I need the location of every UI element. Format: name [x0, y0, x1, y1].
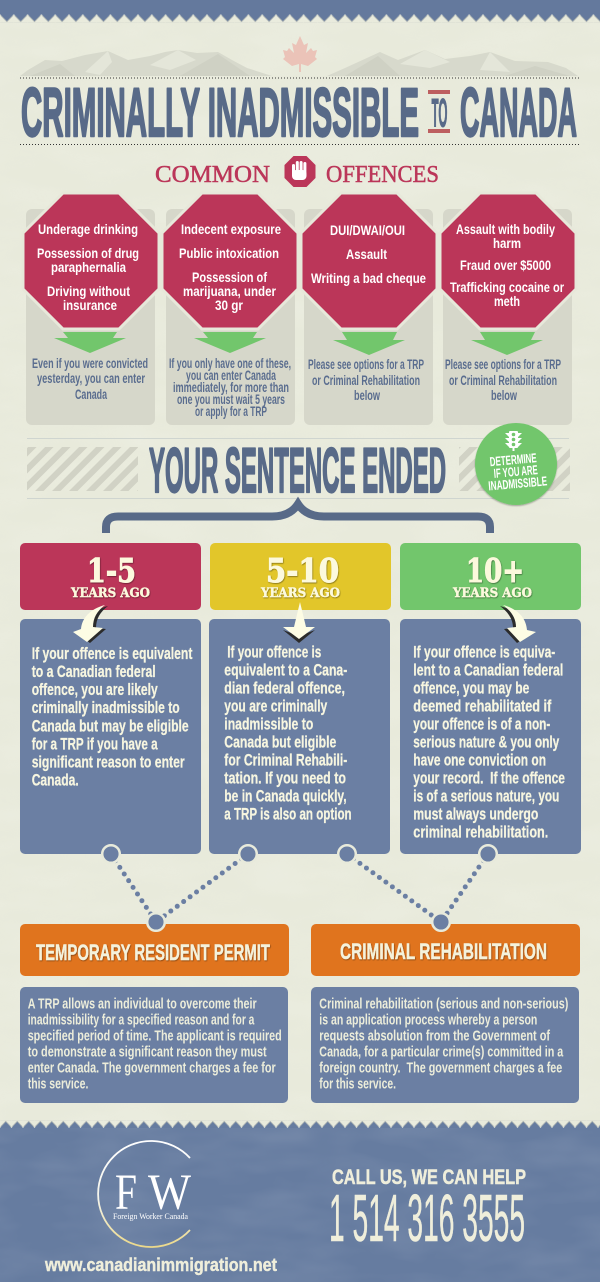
- stop octagon 4: harm: [493, 235, 521, 251]
- panel: 5-10 years text: dian federal offence,: [224, 678, 345, 697]
- panel: 5-10 years text: for Criminal Rehabili-: [224, 750, 347, 769]
- connectors to criminal rehabilitation: [338, 845, 497, 922]
- logo: foreign worker canada: [98, 1141, 192, 1247]
- panel: offence card 1: [23, 193, 159, 425]
- stop octagon 1: Driving without: [47, 283, 130, 299]
- panel: offence card 4: [440, 193, 576, 425]
- panel: 1-5 years text: for a TRP if you have a: [32, 734, 158, 754]
- panel: 1-5 years text: offence, you are likely: [32, 680, 158, 699]
- note 2: one you must wait 5 years: [177, 392, 285, 407]
- arrow: curved right: [500, 605, 536, 643]
- note 3: or Criminal Rehabilitation: [312, 373, 420, 388]
- stop octagon 3: Assault: [346, 246, 387, 262]
- note 1: [32, 356, 148, 402]
- node: criminal rehabilitation: [432, 913, 450, 931]
- stop octagon 1: Possession of drug: [37, 245, 139, 261]
- panel: 5-10 years text: equivalent to a Cana-: [224, 660, 347, 679]
- badge: determine if you are inadmissible: INADMISSIBLE: [488, 473, 548, 493]
- mountains illustration: [20, 50, 578, 76]
- note 4: below: [491, 388, 517, 403]
- panel: offence card 2: [162, 193, 298, 425]
- panel: 10+ years text: criminal rehabilitation.: [413, 822, 548, 841]
- stop octagon 1: paraphernalia: [51, 259, 126, 275]
- panel: 10+ years text: [400, 619, 581, 854]
- panel: 10+ years text: have one conviction on: [413, 750, 546, 769]
- panel: 1-5 years text: Canada but may be eligible: [32, 716, 189, 736]
- footer band: [0, 1121, 600, 1282]
- panel: 10+ years text: must always undergo: [413, 804, 538, 823]
- header: criminal rehabilitation: [311, 924, 580, 976]
- note 3: Please see options for a TRP: [308, 357, 424, 372]
- note 2: [169, 356, 291, 419]
- note 4: [445, 357, 561, 403]
- arrow 3: [333, 332, 405, 355]
- header: 5-10 years ago: [210, 543, 391, 610]
- stop octagon 4: meth: [494, 293, 520, 309]
- stop octagon 2: 30 gr: [215, 297, 243, 313]
- icon: stop hand: [284, 156, 316, 187]
- stop octagon 2: Possession of: [192, 269, 267, 285]
- note 1: Even if you were convicted: [32, 356, 148, 371]
- header: 1-5 years ago: [20, 543, 201, 610]
- bracket: [106, 504, 490, 533]
- badge: determine if you are inadmissible: [475, 423, 557, 505]
- heading: common offences: COMMON: [155, 162, 270, 188]
- header: 5-10 years ago: 5-10: [266, 551, 339, 590]
- panel: trp description: this service.: [28, 1075, 88, 1092]
- stop octagon 1: [23, 193, 159, 329]
- header: 5-10 years ago: YEARS AGO: [260, 586, 340, 601]
- header: 1-5 years ago: YEARS AGO: [70, 586, 150, 601]
- panel: trp description: A TRP allows an individual to overcome their: [28, 995, 257, 1012]
- header: 10+ years ago: YEARS AGO: [452, 586, 532, 601]
- note 2: you can enter Canada: [186, 368, 276, 383]
- panel: 5-10 years text: be in Canada quickly,: [224, 786, 347, 805]
- panel: criminal rehabilitation description: [311, 987, 579, 1103]
- note 2: or apply for a TRP: [195, 404, 267, 419]
- note 2: immediately, for more than: [173, 380, 289, 395]
- stop octagon 2: Indecent exposure: [181, 221, 281, 237]
- stop octagon 3: [301, 193, 437, 329]
- header: 10+ years ago: [400, 543, 581, 610]
- stop octagon 4: Fraud over $5000: [460, 257, 551, 273]
- panel: criminal rehabilitation description: for this service.: [319, 1075, 396, 1092]
- stop octagon 3: Writing a bad cheque: [311, 270, 426, 286]
- panel: 1-5 years text: significant reason to enter: [32, 752, 185, 772]
- panel: 5-10 years text: [209, 619, 390, 854]
- panel: 5-10 years text: you are criminally: [224, 696, 328, 715]
- panel: 5-10 years text: tation. If you need to: [224, 768, 346, 787]
- panel: 1-5 years text: Canada.: [32, 770, 79, 790]
- note 2: If you only have one of these,: [169, 356, 291, 371]
- panel: 5-10 years text: Canada but eligible: [224, 732, 336, 751]
- stop octagon 2: marijuana, under: [183, 283, 276, 299]
- heading: common offences: OFFENCES: [326, 162, 439, 188]
- arrow 4: [471, 332, 543, 355]
- logo: foreign worker canada: Foreign Worker Canada: [113, 1212, 188, 1221]
- logo: foreign worker canada: F: [115, 1165, 137, 1221]
- top blue band: [0, 0, 600, 22]
- note 1: yesterday, you can enter: [37, 371, 146, 386]
- arrow: straight down: [283, 602, 315, 643]
- badge: determine if you are inadmissible: DETERMINE: [489, 450, 537, 469]
- header: 1-5 years ago: 1-5: [87, 551, 136, 590]
- panel: 1-5 years text: If your offence is equivalent: [32, 644, 193, 663]
- stop octagon 4: [440, 193, 576, 329]
- panel: 5-10 years text: If your offence is: [227, 642, 321, 661]
- panel: trp description: specified period of time. The applicant is required: [28, 1027, 282, 1044]
- icon: maple leaf: [283, 36, 317, 72]
- stop octagon 3: DUI/DWAI/OUI: [330, 222, 405, 238]
- stop octagon 4: Assault with bodily: [456, 221, 555, 237]
- icon: traffic light: [505, 431, 522, 451]
- panel: trp description: [20, 987, 288, 1103]
- panel: trp description: to demonstrate a significant reason they must: [28, 1043, 267, 1060]
- title: TO: [432, 92, 448, 136]
- header: 10+ years ago: 10+: [466, 551, 524, 590]
- panel: 5-10 years text: a TRP is also an option: [224, 804, 352, 823]
- note 1: Canada: [75, 387, 107, 402]
- website url: www.canadianimmigration.net: [44, 1255, 277, 1275]
- panel: 10+ years text: deemed rehabilitated if: [413, 696, 552, 715]
- stop octagon 1: insurance: [63, 297, 117, 313]
- panel: 10+ years text: offence, you may be: [413, 678, 529, 697]
- stop octagon 2: Public intoxication: [179, 245, 279, 261]
- panel: trp description: inadmissibility for a specified reason and for a: [28, 1011, 255, 1028]
- logo: foreign worker canada: W: [148, 1165, 192, 1221]
- panel: 1-5 years text: criminally inadmissible to: [32, 698, 180, 717]
- call to action: [329, 1166, 526, 1256]
- note 3: [308, 357, 424, 403]
- stop octagon 2: [162, 193, 298, 329]
- note 3: below: [354, 388, 380, 403]
- panel: 1-5 years text: [20, 619, 201, 854]
- panel: trp description: enter Canada. The government charges a fee for: [28, 1059, 276, 1076]
- arrow: curved left: [73, 605, 108, 643]
- node: temporary resident permit: [147, 913, 165, 931]
- panel: 1-5 years text: to a Canadian federal: [32, 662, 156, 681]
- arrow 2: [194, 332, 266, 353]
- header: temporary resident permit: TEMPORARY RESIDENT PERMIT: [36, 940, 270, 965]
- arrow 1: [54, 332, 126, 353]
- badge: determine if you are inadmissible: IF YOU ARE: [493, 462, 538, 481]
- stop octagon 1: Underage drinking: [38, 221, 138, 237]
- stop octagon 4: Trafficking cocaine or: [450, 279, 564, 295]
- heading: common offences: [155, 156, 439, 188]
- panel: 5-10 years text: inadmissible to: [224, 714, 313, 733]
- call to action: CALL US, WE CAN HELP: [332, 1166, 526, 1189]
- connectors to temporary resident permit: [102, 845, 257, 922]
- panel: offence card 3: [301, 193, 437, 425]
- header: temporary resident permit: [20, 924, 289, 976]
